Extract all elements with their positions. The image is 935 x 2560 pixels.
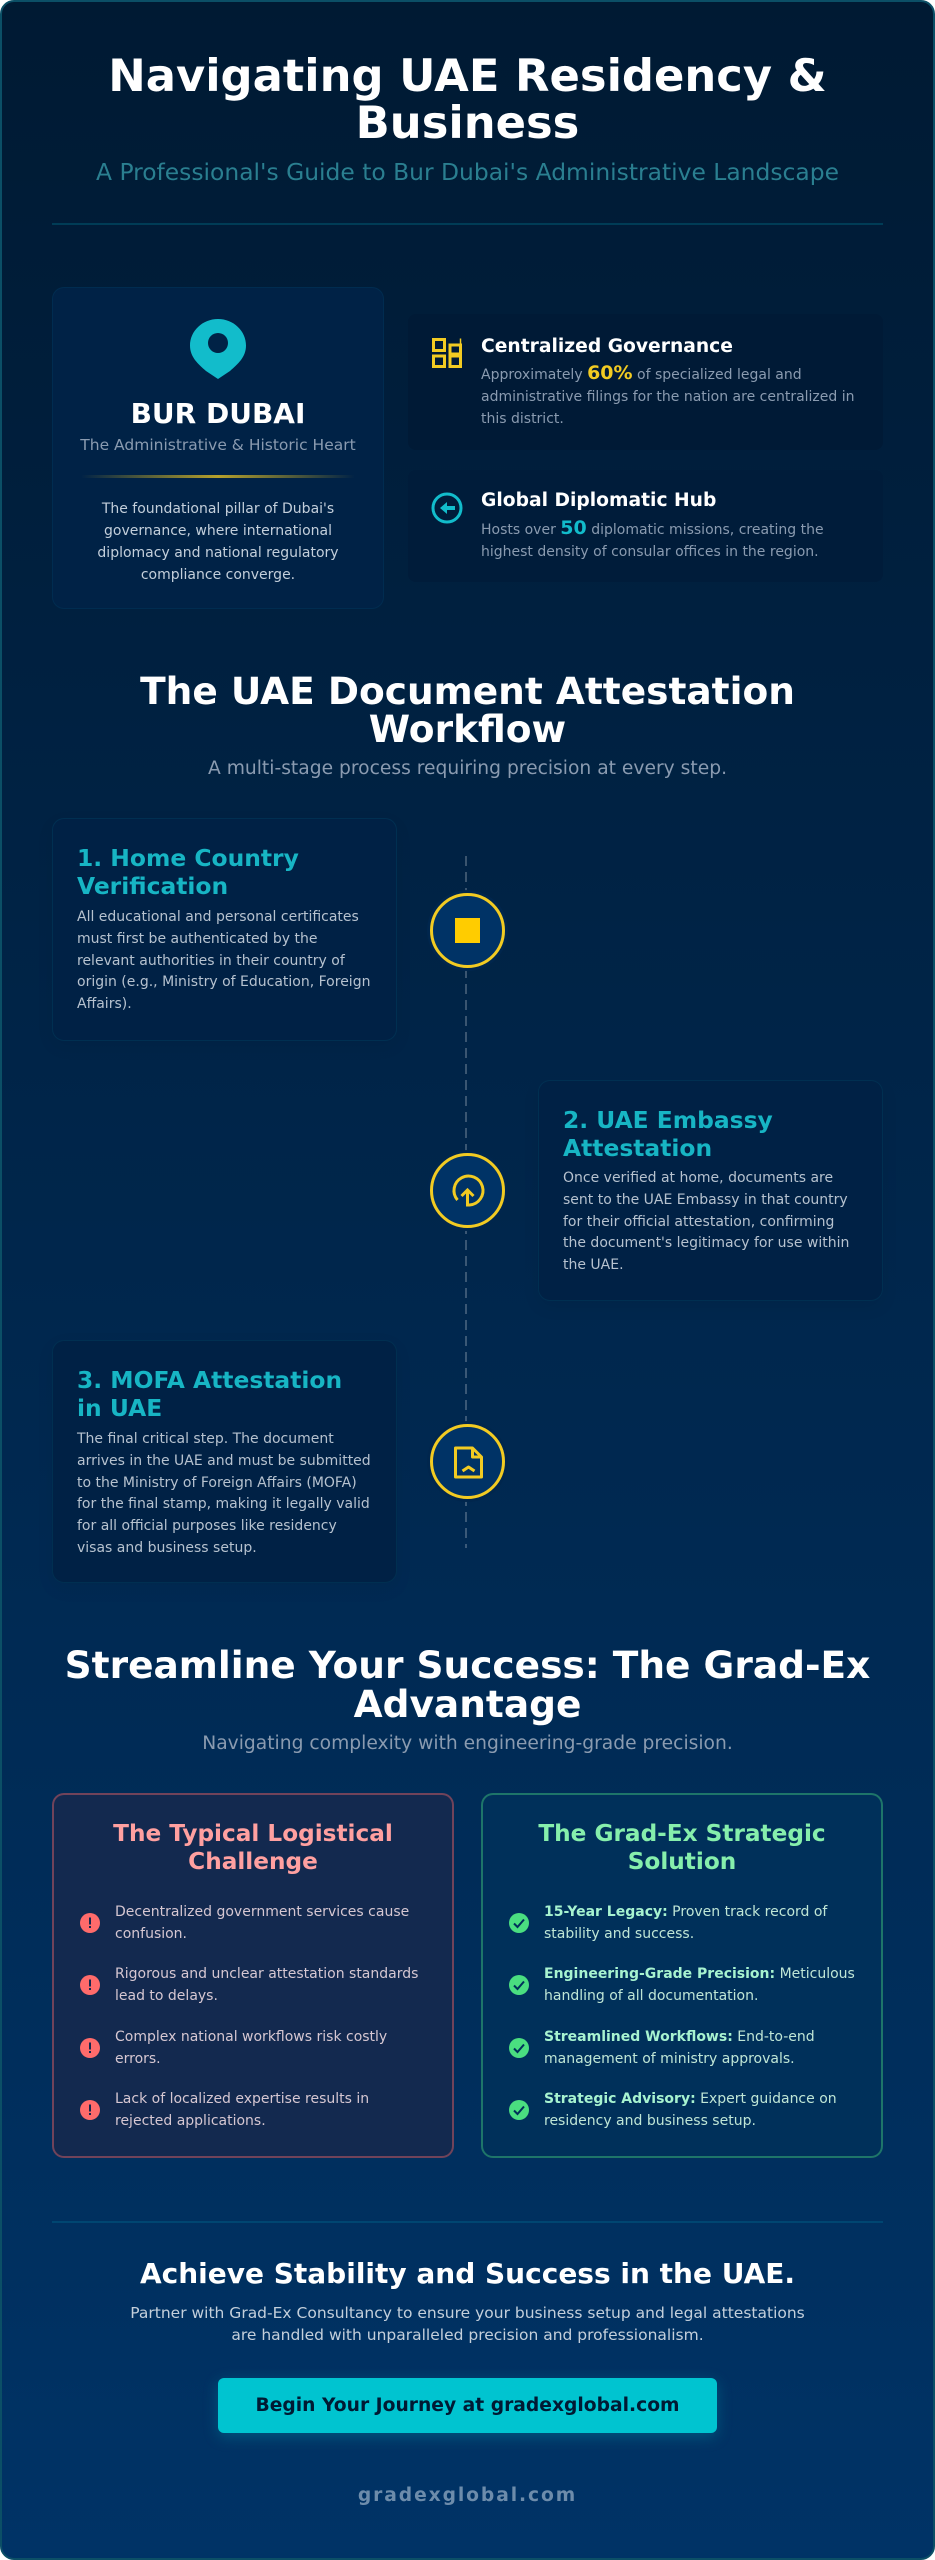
solution item 4: Strategic Advisory: Expert guidance on — [544, 2091, 837, 2107]
challenge item 1 — [80, 1904, 409, 1942]
solution item 4 — [509, 2091, 837, 2129]
solution item 4: residency and business setup. — [544, 2113, 756, 2129]
section heading: attestation workflow — [140, 669, 795, 751]
section subtitle: A multi-stage process requiring precision at every step. — [208, 758, 727, 779]
challenge item 4: Lack of localized expertise results in — [115, 2091, 369, 2107]
call to action text: are handled with unparalleled precision and professionalism. — [231, 2326, 704, 2344]
challenge item 2: Rigorous and unclear attestation standards — [115, 1966, 418, 1982]
step 1 text: Affairs). — [77, 996, 132, 1012]
step 2 text: the document's legitimacy for use within — [563, 1235, 849, 1251]
icon: dashboard grid — [432, 338, 462, 368]
heading: Centralized Governance: Centralized Governance — [481, 336, 733, 357]
challenge item 4 — [80, 2091, 369, 2129]
step 1 heading: Verification — [77, 872, 228, 900]
section heading: Grad-Ex advantage — [65, 1643, 870, 1726]
subtitle: A Professional's Guide to Bur Dubai's Administrative Landscape — [96, 158, 839, 186]
description: The foundational pillar of Dubai's — [102, 501, 334, 517]
step 1 card — [52, 818, 397, 1041]
solution heading — [538, 1820, 826, 1875]
statistic text: 60 percent: Approximately 60% of specialized legal and — [481, 362, 802, 384]
step 1 text — [77, 909, 370, 1012]
challenge item 2 — [80, 1966, 418, 2004]
step 1 heading: 1. Home Country — [77, 844, 299, 872]
section heading: attestation workflow: Workflow — [369, 707, 566, 751]
icon: location pin — [190, 319, 246, 379]
statistic text: 50 missions: highest density of consular offices in the region. — [481, 544, 819, 560]
step 3 text: to the Ministry of Foreign Affairs (MOFA) — [77, 1475, 357, 1491]
title: Navigating UAE Residency & — [108, 49, 827, 102]
button — [218, 2378, 717, 2433]
challenge heading: Challenge — [188, 1848, 318, 1875]
challenge item 3: Complex national workflows risk costly — [115, 2029, 387, 2045]
step 2 node — [430, 1153, 505, 1228]
description: governance, where international — [104, 523, 332, 539]
solution item 2 — [509, 1966, 855, 2004]
statistic text: 50 missions: Hosts over 50 diplomatic missions, creating the — [481, 517, 824, 539]
panel: strategic solution — [481, 1793, 883, 2158]
challenge item 3: errors. — [115, 2051, 161, 2067]
solution item 3 — [509, 2029, 815, 2067]
call to action heading: Achieve Stability and Success in the UAE. — [140, 2257, 795, 2290]
section subtitle: Navigating complexity with engineering-grade precision. — [202, 1733, 733, 1754]
statistic text: 60 percent — [481, 362, 854, 427]
step 2 text: for their official attestation, confirming — [563, 1214, 834, 1230]
step 2 card — [538, 1080, 883, 1301]
challenge heading: The Typical Logistical — [113, 1820, 393, 1847]
step 2 heading — [563, 1106, 773, 1162]
step 2 text: Once verified at home, documents are — [563, 1170, 833, 1186]
step 2 text: sent to the UAE Embassy in that country — [563, 1192, 848, 1208]
step 3 text: The final critical step. The document — [77, 1431, 334, 1447]
panel: Global Diplomatic Hub — [408, 470, 883, 582]
step 3 text — [76, 1431, 371, 1556]
challenge item 2: lead to delays. — [115, 1988, 218, 2004]
challenge item 3 — [80, 2029, 387, 2067]
step 1 text: relevant authorities in their country of — [77, 953, 345, 969]
call to action text — [130, 2304, 805, 2344]
section heading: Grad-Ex advantage: Advantage — [354, 1682, 581, 1726]
solution item 3: management of ministry approvals. — [544, 2051, 795, 2067]
step 1 text: All educational and personal certificates — [77, 909, 359, 925]
solution item 1: stability and success. — [544, 1926, 694, 1942]
description: diplomacy and national regulatory — [97, 545, 339, 561]
description — [97, 501, 339, 583]
section heading: attestation workflow: The UAE Document Attestation — [140, 669, 795, 713]
icon: circled arrow — [432, 492, 462, 524]
challenge item 4: rejected applications. — [115, 2113, 266, 2129]
step 2 text: the UAE. — [563, 1257, 624, 1273]
heading: Bur Dubai: BUR DUBAI — [131, 397, 305, 430]
heading: Global Diplomatic Hub: Global Diplomatic Hub — [481, 490, 716, 511]
solution heading: Solution — [628, 1848, 736, 1875]
step 2 heading: Attestation — [563, 1134, 712, 1162]
step 1 node — [430, 893, 505, 968]
step 1 text: origin (e.g., Ministry of Education, Foreign — [77, 974, 370, 990]
solution item 3: Streamlined Workflows: End-to-end — [544, 2029, 815, 2045]
title: Business — [356, 96, 579, 149]
timeline line — [466, 856, 467, 1548]
step 3 text: for all official purposes like residency — [77, 1518, 337, 1534]
description: compliance converge. — [141, 567, 295, 583]
solution heading: The Grad-Ex Strategic — [538, 1820, 826, 1847]
step 2 heading: 2. UAE Embassy — [563, 1106, 773, 1134]
step 3 node — [430, 1424, 505, 1499]
step 3 card — [52, 1340, 397, 1583]
call to action text: Partner with Grad-Ex Consultancy to ensure your business setup and legal attestations — [130, 2304, 805, 2322]
challenge item 1: Decentralized government services cause — [115, 1904, 409, 1920]
statistic text: 60 percent: this district. — [481, 411, 564, 427]
statistic text: 60 percent: administrative filings for the nation are centralized in — [481, 389, 854, 405]
solution item 2: handling of all documentation. — [544, 1988, 758, 2004]
solution item 1: 15-Year Legacy: Proven track record of — [544, 1904, 827, 1920]
section heading: Grad-Ex advantage: Streamline Your Success: The Grad-Ex — [65, 1643, 870, 1687]
challenge item 1: confusion. — [115, 1926, 187, 1942]
step 3 heading: in UAE — [77, 1394, 162, 1422]
step 2 text — [563, 1170, 849, 1273]
challenge heading — [113, 1820, 393, 1875]
step 1 heading — [77, 844, 299, 900]
panel: Bur Dubai card — [52, 287, 384, 609]
statistic text: 50 missions — [481, 517, 824, 560]
solution item 1 — [509, 1904, 828, 1942]
footer website: gradexglobal.com — [358, 2485, 577, 2506]
solution item 2: Engineering-Grade Precision: Meticulous — [544, 1966, 855, 1982]
panel: logistical challenge — [52, 1793, 454, 2158]
step 3 text: visas and business setup. — [77, 1540, 257, 1556]
step 3 text: for the final stamp, making it legally valid — [77, 1496, 370, 1512]
step 3 text: arrives in the UAE and must be submitted — [77, 1453, 371, 1469]
button: Begin Your Journey at gradexglobal.com — [255, 2395, 680, 2416]
title — [108, 49, 827, 149]
tagline: The Administrative & Historic Heart — [80, 436, 356, 454]
step 3 heading — [77, 1366, 342, 1422]
step 3 heading: 3. MOFA Attestation — [77, 1366, 342, 1394]
panel: Centralized Governance — [408, 314, 883, 450]
step 1 text: must first be authenticated by the — [77, 931, 318, 947]
